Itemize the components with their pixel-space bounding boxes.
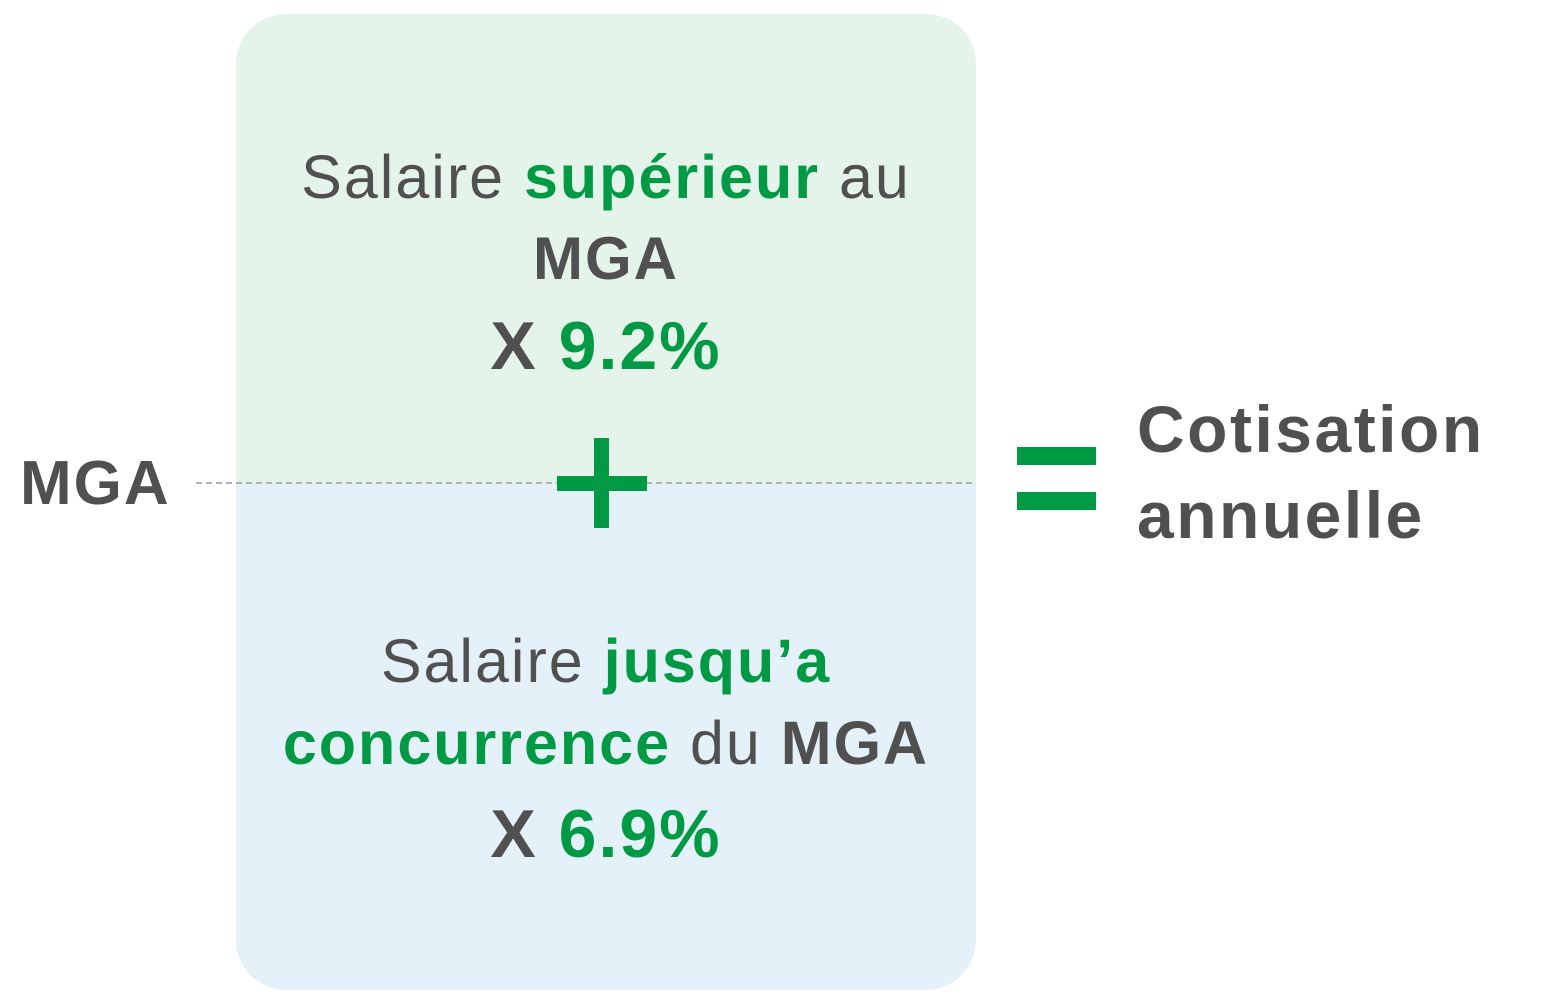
text: result: Cotisation bbox=[1137, 392, 1485, 466]
panel: top section above MGA bbox=[236, 14, 976, 482]
label: MGA: MGA bbox=[20, 449, 171, 518]
icon: plus bbox=[557, 438, 647, 528]
text: top formula bbox=[301, 143, 911, 384]
text: result bbox=[1137, 392, 1485, 552]
text: bottom formula: concurrence du MGA bbox=[283, 709, 929, 777]
text: bottom formula bbox=[283, 627, 929, 872]
icon: equals bbox=[1017, 447, 1096, 510]
text: bottom formula: Salaire jusqu’a bbox=[381, 627, 831, 695]
text: top formula: Salaire supérieur au bbox=[301, 143, 911, 211]
text: top formula: MGA bbox=[533, 225, 679, 292]
text: top formula: X 9.2% bbox=[490, 308, 722, 384]
text: result: annuelle bbox=[1137, 478, 1425, 552]
panel: formula card bbox=[236, 14, 976, 990]
text: bottom formula: X 6.9% bbox=[490, 796, 722, 872]
panel: bottom section up to MGA bbox=[236, 482, 976, 990]
